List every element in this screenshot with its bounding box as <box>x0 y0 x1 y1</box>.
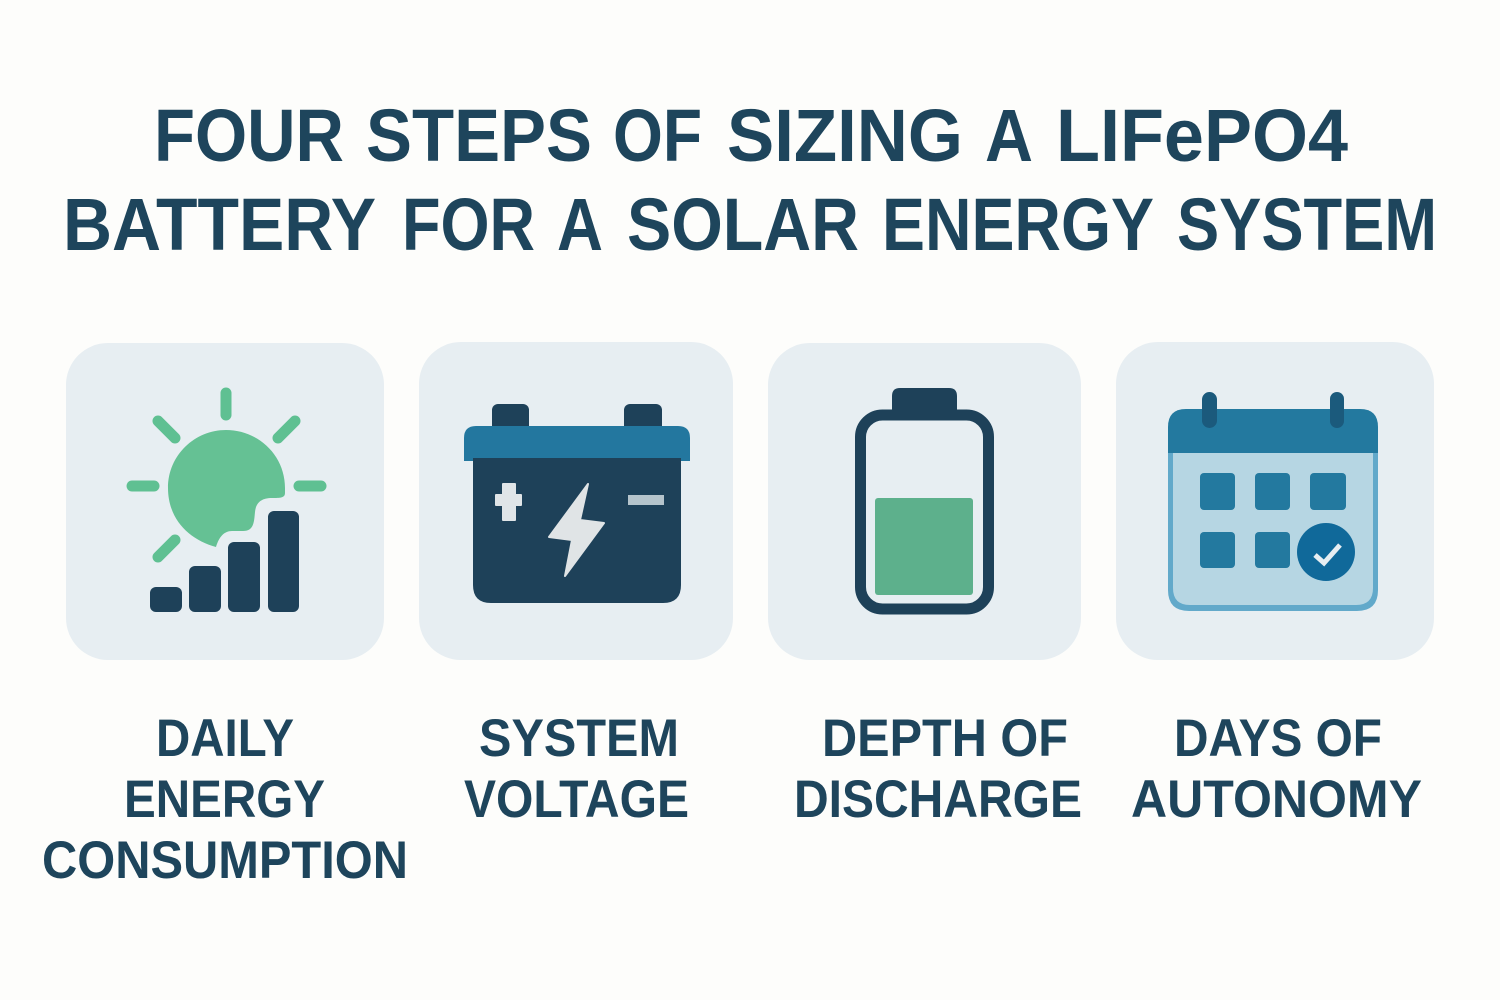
rising bars <box>150 511 299 612</box>
label: days of autonomy: DAYS OF <box>1174 709 1382 768</box>
battery shell <box>860 415 988 609</box>
title: FOUR <box>154 94 344 177</box>
title: SYSTEM <box>1177 183 1437 266</box>
battery body <box>473 455 681 603</box>
terminals <box>492 404 529 434</box>
minus sign <box>628 495 664 505</box>
title: FOR <box>402 183 535 266</box>
title: SOLAR <box>627 183 859 266</box>
panel: days of autonomy <box>1116 342 1434 660</box>
label: system voltage: VOLTAGE <box>464 770 689 829</box>
charge level <box>875 498 973 595</box>
label: depth of discharge: DEPTH OF <box>822 709 1068 768</box>
label: daily energy consumption <box>42 709 408 890</box>
label: daily energy consumption: ENERGY <box>124 770 325 829</box>
calendar header <box>1168 409 1378 453</box>
title: SIZING <box>727 94 963 177</box>
panel: daily energy consumption <box>66 343 384 660</box>
title: STEPS <box>366 94 592 177</box>
battery lid <box>464 426 690 461</box>
check badge <box>1297 523 1355 581</box>
title: LIFePO4 <box>1056 94 1348 177</box>
label: daily energy consumption: DAILY <box>156 709 294 768</box>
check mark <box>1315 545 1340 563</box>
icon: car battery <box>464 404 690 603</box>
calendar page border <box>1168 445 1378 611</box>
title: ENERGY <box>882 183 1154 266</box>
label: system voltage <box>464 709 689 829</box>
title: OF <box>613 94 702 177</box>
binder rings <box>1202 392 1344 428</box>
label: system voltage: SYSTEM <box>479 709 679 768</box>
icon: battery level <box>860 388 988 609</box>
day cells <box>1200 473 1346 568</box>
label: depth of discharge: DISCHARGE <box>794 770 1082 829</box>
title: BATTERY <box>63 183 376 266</box>
sun rays <box>132 393 321 557</box>
plus sign <box>496 484 521 520</box>
title <box>63 94 1437 266</box>
battery cap <box>892 388 957 412</box>
sun disc <box>168 430 285 547</box>
lightning bolt <box>549 484 604 576</box>
icon: sun and bar chart <box>132 393 321 612</box>
label: days of autonomy: AUTONOMY <box>1131 770 1422 829</box>
label: daily energy consumption: CONSUMPTION <box>42 831 408 890</box>
panel: system voltage <box>419 342 733 660</box>
calendar page <box>1173 445 1373 605</box>
label: days of autonomy <box>1131 709 1422 829</box>
panel: depth of discharge <box>768 343 1081 660</box>
title: A <box>985 94 1033 177</box>
label: depth of discharge <box>794 709 1082 829</box>
icon: calendar <box>1168 392 1378 611</box>
title: A <box>557 183 603 266</box>
